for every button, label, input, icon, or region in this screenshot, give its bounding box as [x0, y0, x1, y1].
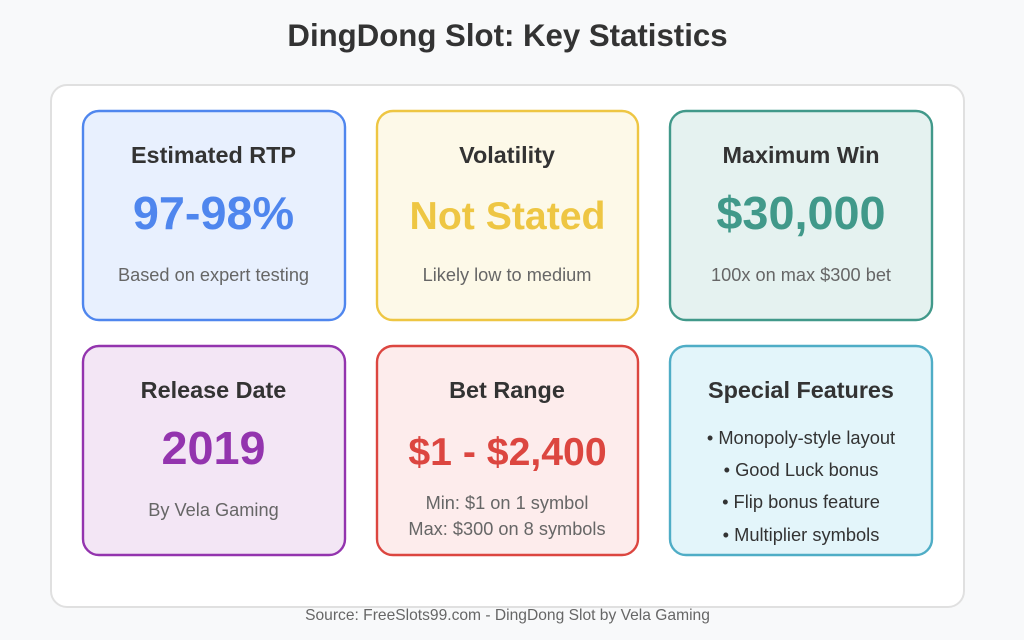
- card: maximum win: $30,000: [716, 187, 886, 239]
- card: special features: • Multiplier symbols: [723, 524, 879, 545]
- card: special features: • Monopoly-style layout: [707, 427, 895, 448]
- card: volatility: [377, 111, 638, 320]
- card: maximum win: Maximum Win: [722, 142, 880, 168]
- card: bet range: Min: $1 on 1 symbol: [426, 493, 588, 513]
- card: maximum win: 100x on max $300 bet: [711, 265, 891, 285]
- card: bet range: Bet Range: [449, 377, 565, 403]
- card: special features: • Flip bonus feature: [722, 491, 880, 512]
- card: bet range: $1 - $2,400: [408, 431, 607, 474]
- source footer: Source: FreeSlots99.com - DingDong Slot by Vela Gaming: [305, 607, 710, 624]
- card: estimated RTP: Based on expert testing: [118, 265, 309, 285]
- card: release date: 2019: [161, 422, 266, 474]
- card: special features: [670, 346, 932, 555]
- card: release date: Release Date: [141, 377, 286, 403]
- main panel: [51, 85, 964, 607]
- card: maximum win: [670, 111, 932, 320]
- card: estimated RTP: Estimated RTP: [131, 142, 296, 168]
- card: release date: [83, 346, 345, 555]
- card: volatility: Volatility: [459, 142, 555, 168]
- card: release date: By Vela Gaming: [148, 500, 279, 520]
- card: bet range: Max: $300 on 8 symbols: [408, 519, 606, 539]
- card: bet range: [377, 346, 638, 555]
- card: special features: • Good Luck bonus: [724, 459, 878, 480]
- card: estimated RTP: 97-98%: [133, 187, 294, 239]
- card: volatility: Likely low to medium: [423, 265, 591, 285]
- card: estimated RTP: [83, 111, 345, 320]
- card: volatility: Not Stated: [410, 195, 605, 238]
- title: DingDong Slot: Key Statistics: [287, 18, 728, 53]
- card: special features: Special Features: [708, 377, 894, 403]
